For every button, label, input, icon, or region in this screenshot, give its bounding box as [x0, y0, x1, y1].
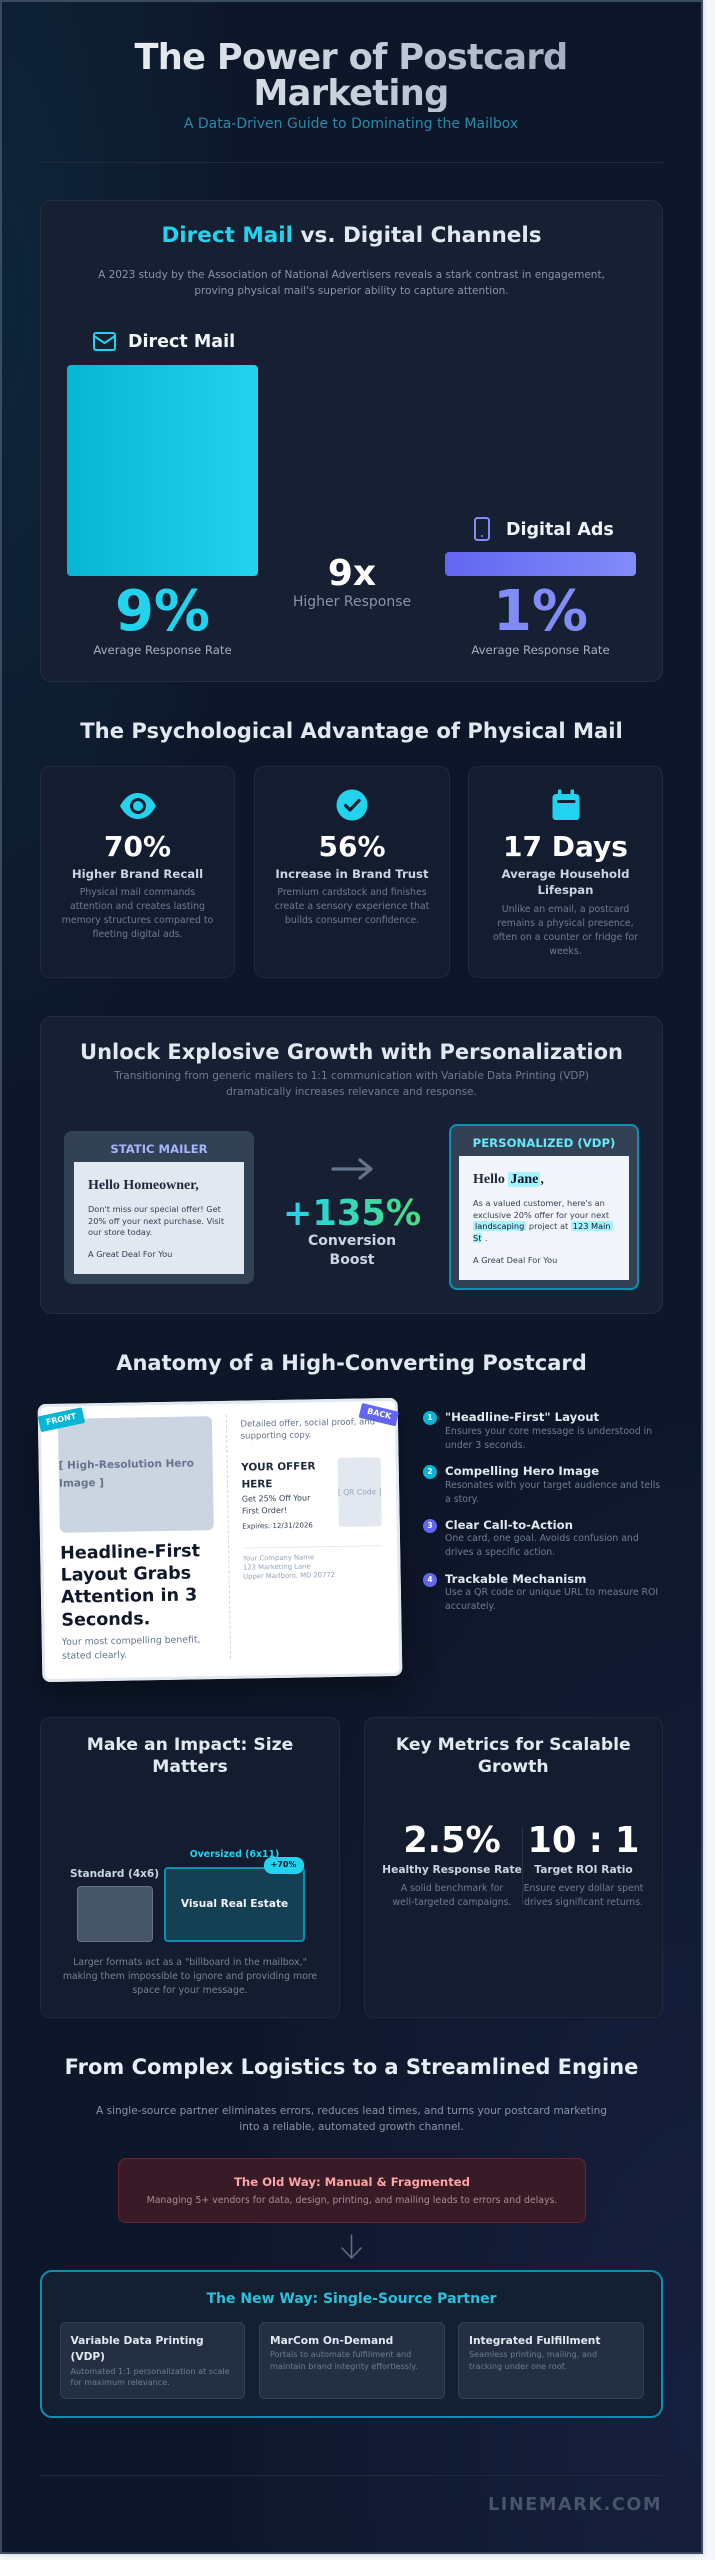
marker 4 — [423, 1572, 437, 1586]
heading: key metrics: Key Metrics for Scalable — [396, 1735, 631, 1755]
description: lifespan: Unlike an email, a postcard — [502, 904, 629, 915]
offer text — [241, 1492, 310, 1515]
heading: size matters — [87, 1735, 293, 1777]
postcard headline: Seconds. — [61, 1608, 150, 1630]
postcard headline: Headline-First — [60, 1541, 200, 1563]
return address — [242, 1553, 335, 1580]
offer text: First Order! — [241, 1505, 287, 1515]
arrow: right — [331, 1158, 373, 1180]
hero image placeholder: Image ] — [58, 1476, 104, 1489]
description: recall: attention and creates lasting — [70, 901, 205, 912]
legend: 2 hero image — [423, 1464, 660, 1505]
static greeting: Hello Homeowner, — [88, 1178, 199, 1193]
personalized label: PERSONALIZED (VDP) — [473, 1136, 615, 1150]
service text: vdp: for maximum relevance. — [70, 2377, 170, 2387]
legend text 3 — [445, 1533, 639, 1558]
badge: +70%: +70% — [271, 1860, 296, 1869]
stat: conversion lift: +135% — [283, 1193, 421, 1234]
marker 1: 1 — [427, 1413, 433, 1422]
back copy — [240, 1417, 375, 1441]
label: higher brand recall: Higher Brand Recall — [72, 866, 203, 880]
standard size box — [77, 1886, 152, 1942]
heading: direct mail vs digital channels: Direct Mail vs. Digital Channels — [161, 223, 542, 248]
postcard headline: Layout Grabs — [60, 1563, 191, 1585]
description: lifespan: weeks. — [549, 946, 582, 957]
fold line — [225, 1414, 230, 1658]
description: response rate: well-targeted campaigns. — [393, 1897, 511, 1908]
front tag: FRONT — [45, 1411, 76, 1427]
description: lifespan — [493, 904, 638, 957]
description: roi ratio — [524, 1883, 644, 1908]
title: The Power of Postcard — [134, 37, 568, 78]
size description: space for your message. — [132, 1985, 248, 1996]
static body text: Don't miss our special offer! Get — [88, 1204, 221, 1214]
heading: psychological advantage: The Psychological Advantage of Physical Mail — [80, 718, 623, 743]
personalized mailer box — [449, 1124, 639, 1290]
service card: fulfillment — [458, 2322, 644, 2399]
description: response rate — [392, 1883, 511, 1908]
description: trust — [275, 887, 430, 926]
service card: vdp — [60, 2322, 245, 2399]
personalized body text: exclusive 20% offer for your next — [473, 1210, 609, 1220]
personalized body text: As a valued customer, here's an — [473, 1198, 605, 1208]
caption: direct mail rate: Average Response Rate — [93, 643, 232, 657]
panel: recall card — [40, 766, 235, 978]
marker 2: 2 — [427, 1467, 433, 1476]
description: response rate: A solid benchmark for — [401, 1883, 503, 1894]
panel: personalization — [40, 1016, 663, 1314]
service text: marcom: maintain brand integrity effortlessly. — [270, 2361, 417, 2371]
back copy: Detailed offer, social proof, and — [240, 1417, 375, 1429]
legend text 2: Resonates with your target audience and tells — [445, 1480, 660, 1491]
icon: envelope — [93, 332, 116, 351]
panel: key metrics — [364, 1717, 663, 2018]
old way title: The Old Way: Manual & Fragmented — [234, 2175, 470, 2189]
offer text: Get 25% Off Your — [241, 1492, 310, 1503]
panel: old way — [118, 2158, 586, 2223]
label: target roi ratio: Target ROI Ratio — [534, 1863, 633, 1876]
service title: fulfillment: Integrated Fulfillment — [469, 2334, 600, 2346]
caption: higher response: Higher Response — [293, 594, 411, 610]
marker 1 — [423, 1411, 437, 1425]
caption: digital ads rate: Average Response Rate — [471, 643, 610, 657]
oversized box — [164, 1867, 305, 1942]
heading: size matters: Make an Impact: Size — [87, 1735, 293, 1755]
panel: direct mail vs digital — [40, 200, 663, 682]
icon: eye — [120, 793, 156, 819]
marker 4: 4 — [427, 1574, 433, 1584]
static sign-off: A Great Deal For You — [88, 1248, 172, 1258]
postcard benefit: Your most compelling benefit, — [61, 1633, 200, 1647]
hero image placeholder — [57, 1416, 213, 1532]
bar: digital ads — [445, 552, 636, 576]
personalized body text: landscaping project at 123 Main — [475, 1221, 611, 1231]
offer heading — [241, 1460, 316, 1490]
legend text 2: a story. — [445, 1494, 479, 1505]
legend text 4: Use a QR code or unique URL to measure ROI — [445, 1587, 658, 1598]
stat: 2.5 percent: 2.5% — [403, 1820, 501, 1861]
bar: direct mail — [67, 365, 258, 576]
service text: vdp — [70, 2366, 230, 2389]
label: conversion boost: Conversion — [308, 1233, 396, 1249]
comparison intro text: proving physical mail's superior ability to capture attention. — [194, 285, 509, 297]
expiry: Expires: 12/31/2026 — [242, 1520, 312, 1530]
oversized box: Visual Real Estate — [181, 1898, 288, 1910]
legend text 4: accurately. — [445, 1601, 496, 1612]
label: digital ads: Digital Ads — [506, 520, 614, 540]
heading: personalization: Unlock Explosive Growth with Personalization — [80, 1040, 623, 1064]
legend: 3 call to action — [423, 1518, 639, 1558]
size description: making them impossible to ignore and providing more — [63, 1971, 317, 1982]
old way text: Managing 5+ vendors for data, design, printing, and mailing leads to errors and delays. — [147, 2195, 557, 2206]
back copy: supporting copy. — [240, 1430, 311, 1441]
size description: Larger formats act as a "billboard in the mailbox," — [73, 1957, 307, 1968]
legend: 1 headline-first — [423, 1410, 652, 1451]
panel: size matters — [40, 1717, 340, 2018]
icon: calendar — [552, 790, 580, 820]
postcard benefit — [61, 1633, 200, 1661]
panel: lifespan card — [468, 766, 663, 978]
description: recall — [62, 887, 213, 940]
heading: anatomy: Anatomy of a High-Converting Postcard — [116, 1351, 587, 1375]
static body text: our store today. — [88, 1227, 152, 1237]
personalization intro text: dramatically increases relevance and response. — [226, 1086, 477, 1098]
description: recall: Physical mail commands — [80, 887, 195, 898]
postcard headline: Attention in 3 — [60, 1585, 197, 1608]
static mailer box — [64, 1131, 254, 1284]
legend title 4: Trackable Mechanism — [445, 1572, 586, 1586]
personalization intro text: Transitioning from generic mailers to 1:1 communication with Variable Data Printing (VDP) — [114, 1070, 589, 1082]
label: conversion boost — [308, 1233, 396, 1268]
personalization intro text — [114, 1070, 589, 1098]
arrow: down — [341, 2234, 362, 2259]
service text: marcom — [270, 2349, 417, 2372]
service title: vdp — [70, 2334, 204, 2363]
postcard headline — [60, 1541, 200, 1630]
new way title: The New Way: Single-Source Partner — [206, 2291, 496, 2307]
service text: fulfillment — [469, 2349, 597, 2372]
logistics intro text: A single-source partner eliminates errors, reduces lead times, and turns your postcard marketing — [96, 2104, 607, 2116]
offer heading: HERE — [241, 1477, 272, 1490]
heading: size matters: Matters — [152, 1757, 228, 1777]
return address: Your Company Name — [242, 1553, 314, 1562]
marker 3 — [423, 1519, 437, 1533]
postcard benefit: stated clearly. — [61, 1649, 127, 1661]
static mailer card — [74, 1162, 244, 1274]
service title: marcom: MarCom On-Demand — [270, 2334, 393, 2346]
label: standard size: Standard (4x6) — [70, 1868, 159, 1880]
label: healthy response rate: Healthy Response Rate — [382, 1863, 522, 1876]
logistics intro text — [96, 2104, 607, 2133]
description: recall: memory structures compared to — [62, 915, 213, 926]
stat: 1 percent: 1% — [493, 579, 588, 644]
legend: 4 trackable — [423, 1572, 658, 1612]
size description — [63, 1957, 317, 1996]
description: roi ratio: Ensure every dollar spent — [524, 1883, 643, 1894]
service title: vdp: Variable Data Printing — [70, 2334, 204, 2346]
personalized card — [459, 1156, 629, 1280]
description: lifespan: remains a physical presence, — [497, 918, 634, 929]
service text: fulfillment: Seamless printing, mailing, and — [469, 2349, 597, 2359]
logistics intro text: into a reliable, automated growth channel. — [239, 2121, 464, 2133]
front tag — [37, 1407, 84, 1432]
comparison intro text — [98, 269, 605, 297]
label: increase in brand trust: Increase in Brand Trust — [275, 866, 429, 880]
stat: 17 days: 17 Days — [503, 830, 628, 863]
QR code placeholder — [337, 1457, 381, 1527]
legend title 2: Compelling Hero Image — [445, 1464, 599, 1478]
legend title 1: "Headline-First" Layout — [445, 1410, 599, 1424]
offer heading: YOUR OFFER — [241, 1460, 315, 1473]
QR code placeholder: [ QR Code ] — [337, 1487, 381, 1497]
legend text 1: Ensures your core message is understood in — [445, 1426, 652, 1437]
panel: trust card — [254, 766, 450, 978]
description: trust: create a sensory experience that — [275, 901, 429, 912]
legend title 3: Clear Call-to-Action — [445, 1518, 573, 1532]
static body text: 20% off your next purchase. Visit — [88, 1216, 224, 1226]
heading: key metrics — [396, 1735, 631, 1777]
personalized body text: St . — [473, 1233, 488, 1243]
icon: check circle — [336, 790, 368, 820]
description: trust: builds consumer confidence. — [285, 915, 419, 926]
personalized sign-off: A Great Deal For You — [473, 1254, 557, 1264]
legend text 1: under 3 seconds. — [445, 1440, 525, 1451]
back tag: BACK — [366, 1406, 392, 1420]
footer brand: LINEMARK.COM — [488, 2495, 662, 2515]
legend text 3: drives a specific action. — [445, 1547, 555, 1558]
marker 2 — [423, 1465, 437, 1479]
personalized body text — [473, 1198, 613, 1243]
label: average household lifespan: Lifespan — [538, 883, 594, 897]
service text: marcom: Portals to automate fulfillment and — [270, 2349, 411, 2359]
heading: logistics: From Complex Logistics to a Streamlined Engine — [65, 2055, 638, 2079]
stat: 56 percent: 56% — [318, 830, 386, 863]
return address: Upper Marlboro, MD 20772 — [243, 1571, 335, 1580]
description: lifespan: often on a counter or fridge for — [493, 932, 638, 943]
badge: +70% — [264, 1857, 304, 1874]
description: trust: Premium cardstock and finishes — [277, 887, 427, 898]
service text: vdp: Automated 1:1 personalization at scale — [70, 2366, 230, 2376]
service title: vdp: (VDP) — [70, 2350, 105, 2363]
static body text — [88, 1204, 224, 1237]
label: average household lifespan — [502, 866, 629, 897]
hero image placeholder: [ High-Resolution Hero — [58, 1457, 193, 1471]
subtitle: A Data-Driven Guide to Dominating the Mailbox — [184, 116, 518, 132]
marker 3: 3 — [427, 1521, 433, 1530]
stat: 70 percent: 70% — [104, 830, 171, 863]
stat: 9 percent: 9% — [115, 579, 210, 644]
stat: 9x: 9x — [328, 553, 376, 594]
panel: new way — [40, 2270, 663, 2418]
description: recall: fleeting digital ads. — [92, 929, 182, 940]
icon: phone — [474, 517, 490, 541]
title — [40, 40, 662, 112]
legend text 3: One card, one goal. Avoids confusion and — [445, 1533, 639, 1544]
legend text 1 — [445, 1426, 652, 1451]
legend text 2 — [445, 1480, 660, 1505]
comparison intro text: A 2023 study by the Association of National Advertisers reveals a stark contrast in engagement, — [98, 269, 605, 281]
personalized greeting: Hello Jane, — [473, 1172, 544, 1187]
stat: roi ratio: 10 : 1 — [527, 1820, 640, 1861]
postcard diagram — [37, 1397, 402, 1682]
service card: marcom — [259, 2322, 444, 2399]
static mailer label: STATIC MAILER — [110, 1142, 208, 1156]
label: direct mail: Direct Mail — [128, 332, 235, 352]
label: conversion boost: Boost — [330, 1252, 374, 1268]
description: roi ratio: drives significant returns. — [524, 1897, 643, 1908]
service text: fulfillment: tracking under one roof. — [469, 2361, 566, 2371]
back tag — [358, 1402, 399, 1426]
title: Marketing — [253, 73, 449, 114]
label: average household lifespan: Average Household — [502, 866, 629, 880]
heading: key metrics: Growth — [478, 1757, 549, 1777]
legend text 4 — [445, 1587, 658, 1612]
label: oversized: Oversized (6x11) — [190, 1849, 279, 1860]
return address: 123 Marketing Lane — [242, 1562, 310, 1571]
